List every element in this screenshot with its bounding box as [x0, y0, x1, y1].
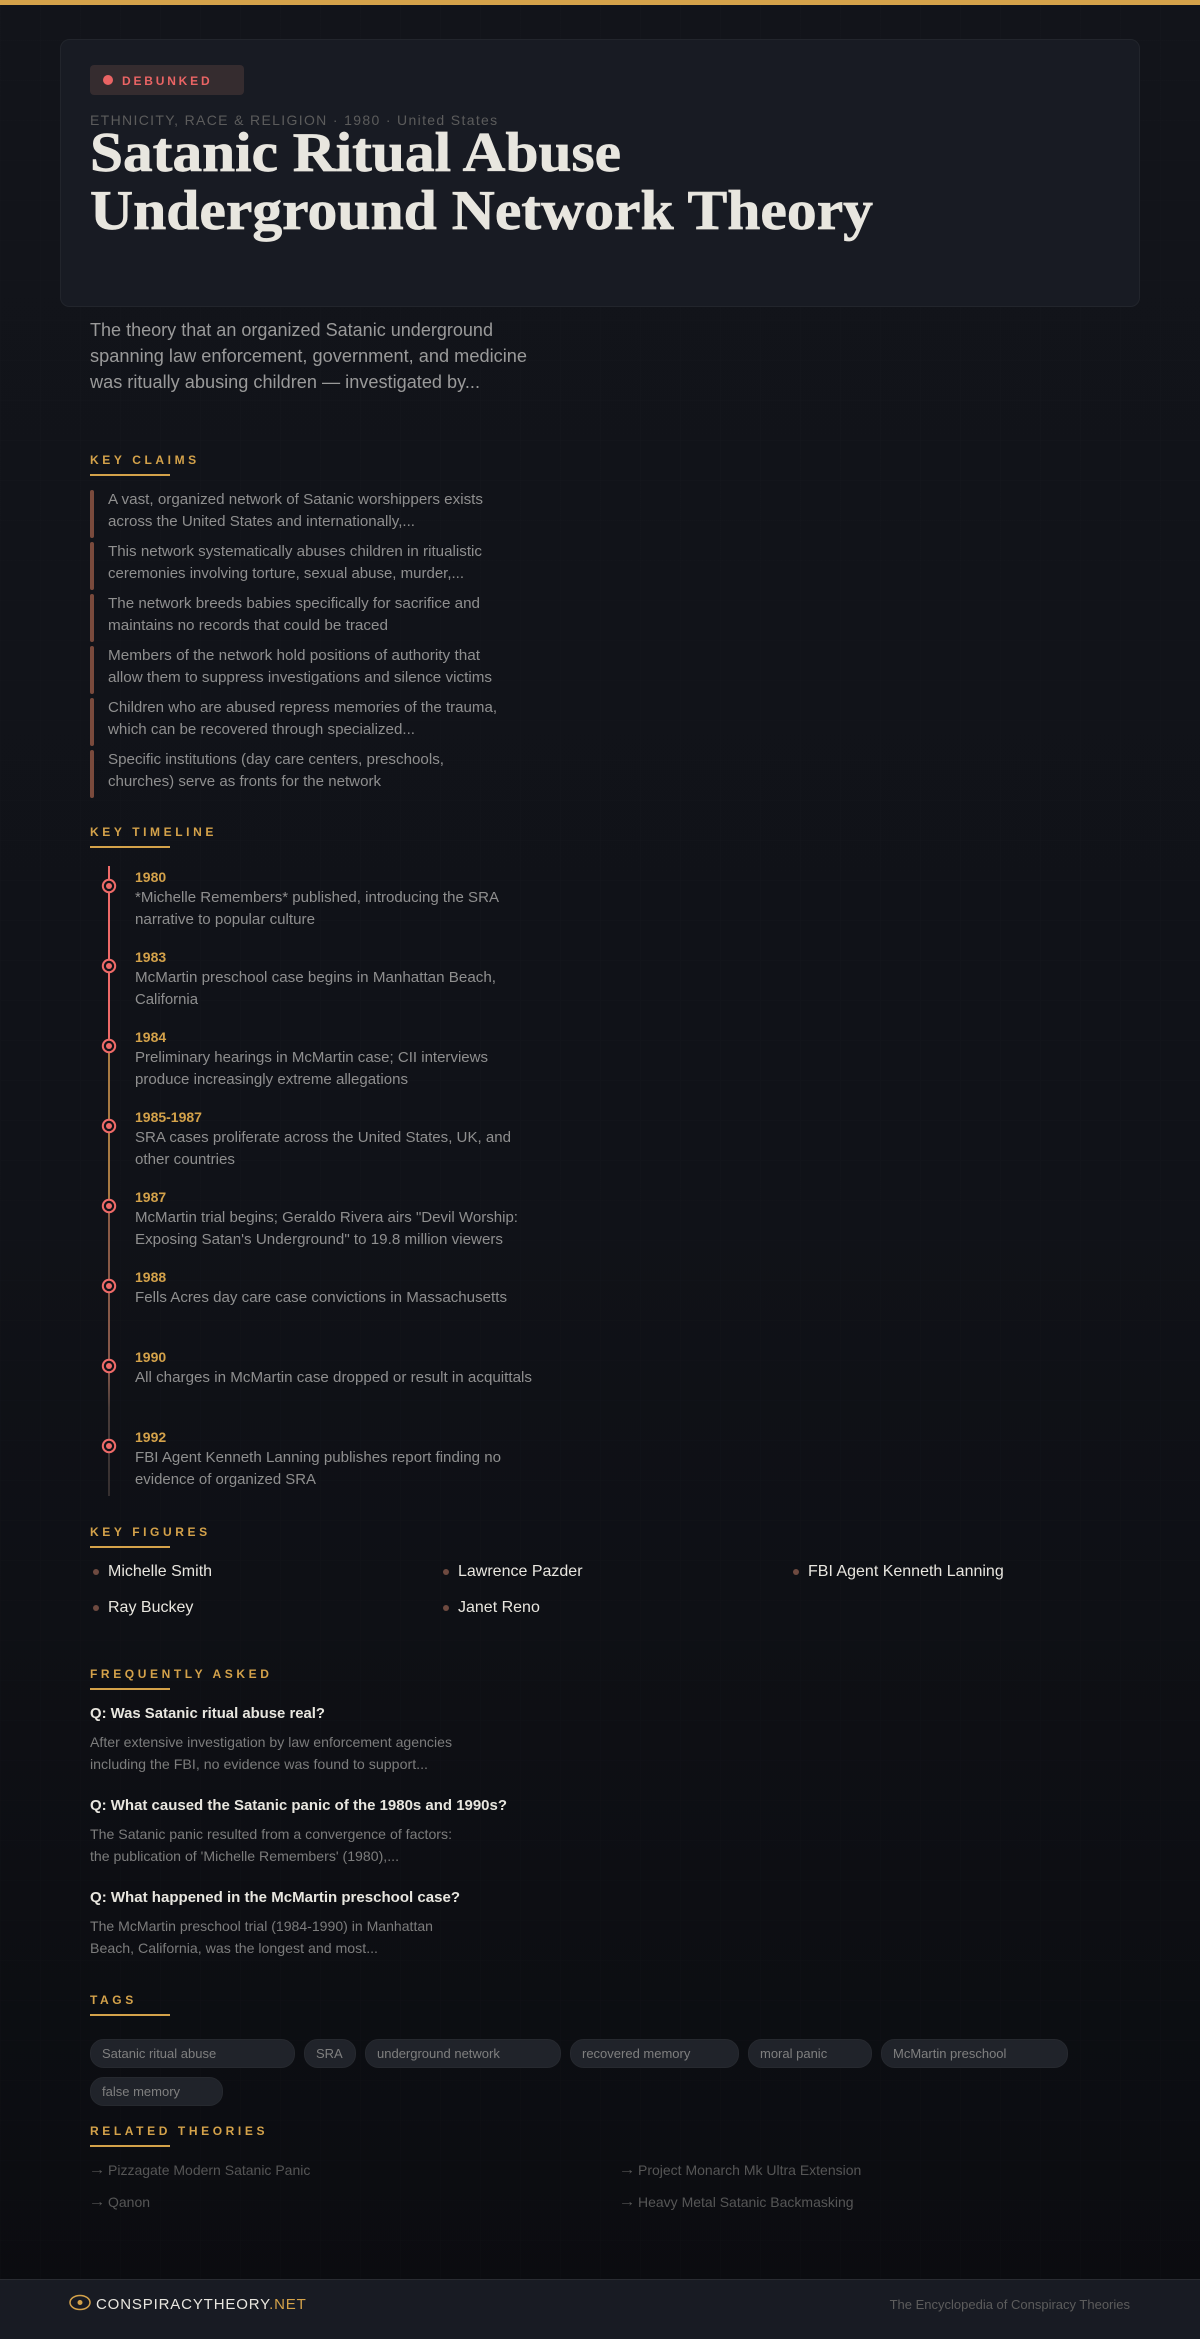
event 1983: 1983 [135, 949, 166, 965]
heading: key claims: KEY CLAIMS [90, 453, 200, 467]
related: Project Monarch: Project Monarch Mk Ultra Extension [638, 2162, 861, 2178]
claim 5: Children who are abused repress memories of the trauma, [108, 699, 497, 716]
related: Qanon: → [88, 2193, 106, 2209]
tag: underground network [366, 2040, 560, 2068]
event 1983 [103, 949, 496, 1008]
event 1980: *Michelle Remembers* published, introducing the SRA [135, 889, 499, 906]
claim 3: maintains no records that could be traced [108, 617, 388, 634]
status badge: debunked [90, 65, 244, 95]
figure: Lawrence Pazder: Lawrence Pazder [458, 1563, 583, 1580]
event 1987: 1987 [135, 1189, 166, 1205]
tag: Satanic ritual abuse: Satanic ritual abuse [102, 2046, 216, 2061]
section: key claims [90, 453, 497, 798]
event 1988: Fells Acres day care case convictions in Massachusetts [135, 1289, 507, 1306]
tag: underground network: underground network [377, 2046, 500, 2061]
title: Underground Network Theory [90, 180, 873, 242]
claim 3: The network breeds babies specifically for sacrifice and [108, 595, 480, 612]
event 1984: Preliminary hearings in McMartin case; CII interviews [135, 1049, 488, 1066]
footer [0, 2279, 1200, 2339]
event 1987: McMartin trial begins; Geraldo Rivera airs "Devil Worship: [135, 1209, 518, 1226]
summary text [89, 320, 527, 392]
claim 6: Specific institutions (day care centers, preschools, [108, 751, 444, 768]
claim 4: allow them to suppress investigations and silence victims [108, 669, 492, 686]
heading: tags [90, 1993, 170, 2016]
claim 2: ceremonies involving torture, sexual abuse, murder,... [108, 565, 464, 582]
status badge: debunked: DEBUNKED [122, 74, 212, 88]
event 1988 [103, 1269, 507, 1306]
tag: false memory [90, 2078, 222, 2106]
event 1992: FBI Agent Kenneth Lanning publishes report finding no [135, 1449, 501, 1466]
section: tags [90, 1993, 1068, 2106]
event 1987 [103, 1189, 518, 1248]
title: Satanic Ritual Abuse [90, 122, 621, 184]
event 1980 [103, 869, 499, 928]
faq 3: The McMartin preschool trial (1984-1990) in Manhattan [90, 1918, 433, 1934]
event 1984: produce increasingly extreme allegations [135, 1071, 408, 1088]
related: Qanon: Qanon [108, 2194, 150, 2210]
faq 2: The Satanic panic resulted from a convergence of factors: [90, 1826, 452, 1842]
event 1980: 1980 [135, 869, 166, 885]
claim 6: churches) serve as fronts for the network [108, 773, 382, 790]
faq 2: Q: What caused the Satanic panic of the 1980s and 1990s? [90, 1797, 507, 1814]
section: related theories [88, 2124, 861, 2210]
heading: key timeline: KEY TIMELINE [90, 825, 217, 839]
event 1987: Exposing Satan's Underground" to 19.8 million viewers [135, 1231, 503, 1248]
category and date line: ETHNICITY, RACE & RELIGION · 1980 · United States [90, 112, 499, 128]
icon: eye logo [70, 2296, 90, 2310]
event 1988: 1988 [135, 1269, 166, 1285]
tag: recovered memory [570, 2040, 738, 2068]
event 1984: 1984 [135, 1029, 166, 1045]
event 1992: evidence of organized SRA [135, 1471, 316, 1488]
claim 1 [90, 490, 483, 538]
related: Pizzagate: Pizzagate Modern Satanic Panic [108, 2162, 310, 2178]
event 1983: McMartin preschool case begins in Manhattan Beach, [135, 969, 496, 986]
heading: key figures: KEY FIGURES [90, 1525, 211, 1539]
event 1985-1987: other countries [135, 1151, 235, 1168]
faq 2 [90, 1797, 507, 1864]
event 1990 [103, 1349, 532, 1386]
claim 2: This network systematically abuses children in ritualistic [108, 543, 483, 560]
summary text: The theory that an organized Satanic underground [90, 320, 493, 340]
event 1980: narrative to popular culture [135, 911, 315, 928]
figure: Ray Buckey: Ray Buckey [108, 1599, 193, 1616]
panel: header card [60, 40, 1140, 306]
related: Project Monarch: → [618, 2161, 636, 2177]
event 1990: All charges in McMartin case dropped or result in acquittals [135, 1369, 532, 1386]
event 1992: 1992 [135, 1429, 166, 1445]
event 1992 [103, 1429, 501, 1488]
event 1984 [103, 1029, 488, 1088]
heading: key timeline [90, 825, 217, 848]
claim 2 [90, 542, 483, 590]
event 1985-1987: 1985-1987 [135, 1109, 202, 1125]
claim 6 [90, 750, 444, 798]
event 1990: 1990 [135, 1349, 166, 1365]
top accent bar [0, 0, 1200, 5]
related: Heavy Metal: Heavy Metal Satanic Backmasking [638, 2194, 854, 2210]
summary text: spanning law enforcement, government, and medicine [90, 346, 527, 366]
related: Qanon [88, 2193, 150, 2210]
summary text: was ritually abusing children — investigated by... [89, 372, 480, 392]
heading: frequently asked: FREQUENTLY ASKED [90, 1667, 273, 1681]
heading: related theories: RELATED THEORIES [90, 2124, 268, 2138]
tag: moral panic: moral panic [760, 2046, 828, 2061]
faq 1: After extensive investigation by law enforcement agencies [90, 1734, 452, 1750]
faq 1 [90, 1705, 452, 1772]
tag: McMartin preschool [882, 2040, 1068, 2068]
related: Pizzagate: → [88, 2161, 106, 2177]
heading: key figures [90, 1525, 211, 1548]
claim 4 [90, 646, 492, 694]
figure: FBI Agent Kenneth Lanning: FBI Agent Kenneth Lanning [808, 1563, 1004, 1580]
faq 2: the publication of 'Michelle Remembers' (1980),... [90, 1848, 399, 1864]
tag: SRA: SRA [316, 2046, 343, 2061]
tag: Satanic ritual abuse [90, 2040, 294, 2068]
heading: key claims [90, 453, 200, 476]
tag: McMartin preschool: McMartin preschool [893, 2046, 1007, 2061]
tag: moral panic [748, 2040, 872, 2068]
figure: Janet Reno: Janet Reno [458, 1599, 540, 1616]
event 1985-1987 [103, 1109, 511, 1168]
related: Heavy Metal: → [618, 2193, 636, 2209]
faq 1: including the FBI, no evidence was found to support... [90, 1756, 428, 1772]
claim 1: A vast, organized network of Satanic worshippers exists [108, 491, 483, 508]
logo wordmark: CONSPIRACYTHEORY.NET [96, 2296, 307, 2313]
heading: tags: TAGS [90, 1993, 137, 2007]
tag: false memory: false memory [102, 2084, 181, 2099]
section: key figures [90, 1525, 1004, 1616]
footer tagline: The Encyclopedia of Conspiracy Theories [890, 2297, 1130, 2312]
event 1983: California [135, 991, 199, 1008]
claim 1: across the United States and internationally,... [108, 513, 415, 530]
section: key timeline [90, 825, 532, 1496]
tag: recovered memory: recovered memory [582, 2046, 691, 2061]
title [90, 122, 873, 242]
faq 1: Q: Was Satanic ritual abuse real? [90, 1705, 325, 1722]
figure: Michelle Smith: Michelle Smith [108, 1563, 212, 1580]
event 1985-1987: SRA cases proliferate across the United States, UK, and [135, 1129, 511, 1146]
faq 3: Beach, California, was the longest and most... [90, 1940, 378, 1956]
claim 5: which can be recovered through specialized... [107, 721, 415, 738]
claim 4: Members of the network hold positions of authority that [108, 647, 481, 664]
section: frequently asked [90, 1667, 507, 1956]
timeline vertical line [108, 866, 110, 1496]
tag: SRA [304, 2040, 356, 2068]
faq 3: Q: What happened in the McMartin preschool case? [90, 1889, 460, 1906]
faq 3 [90, 1889, 460, 1956]
claim 5 [90, 698, 497, 746]
claim 3 [90, 594, 480, 642]
